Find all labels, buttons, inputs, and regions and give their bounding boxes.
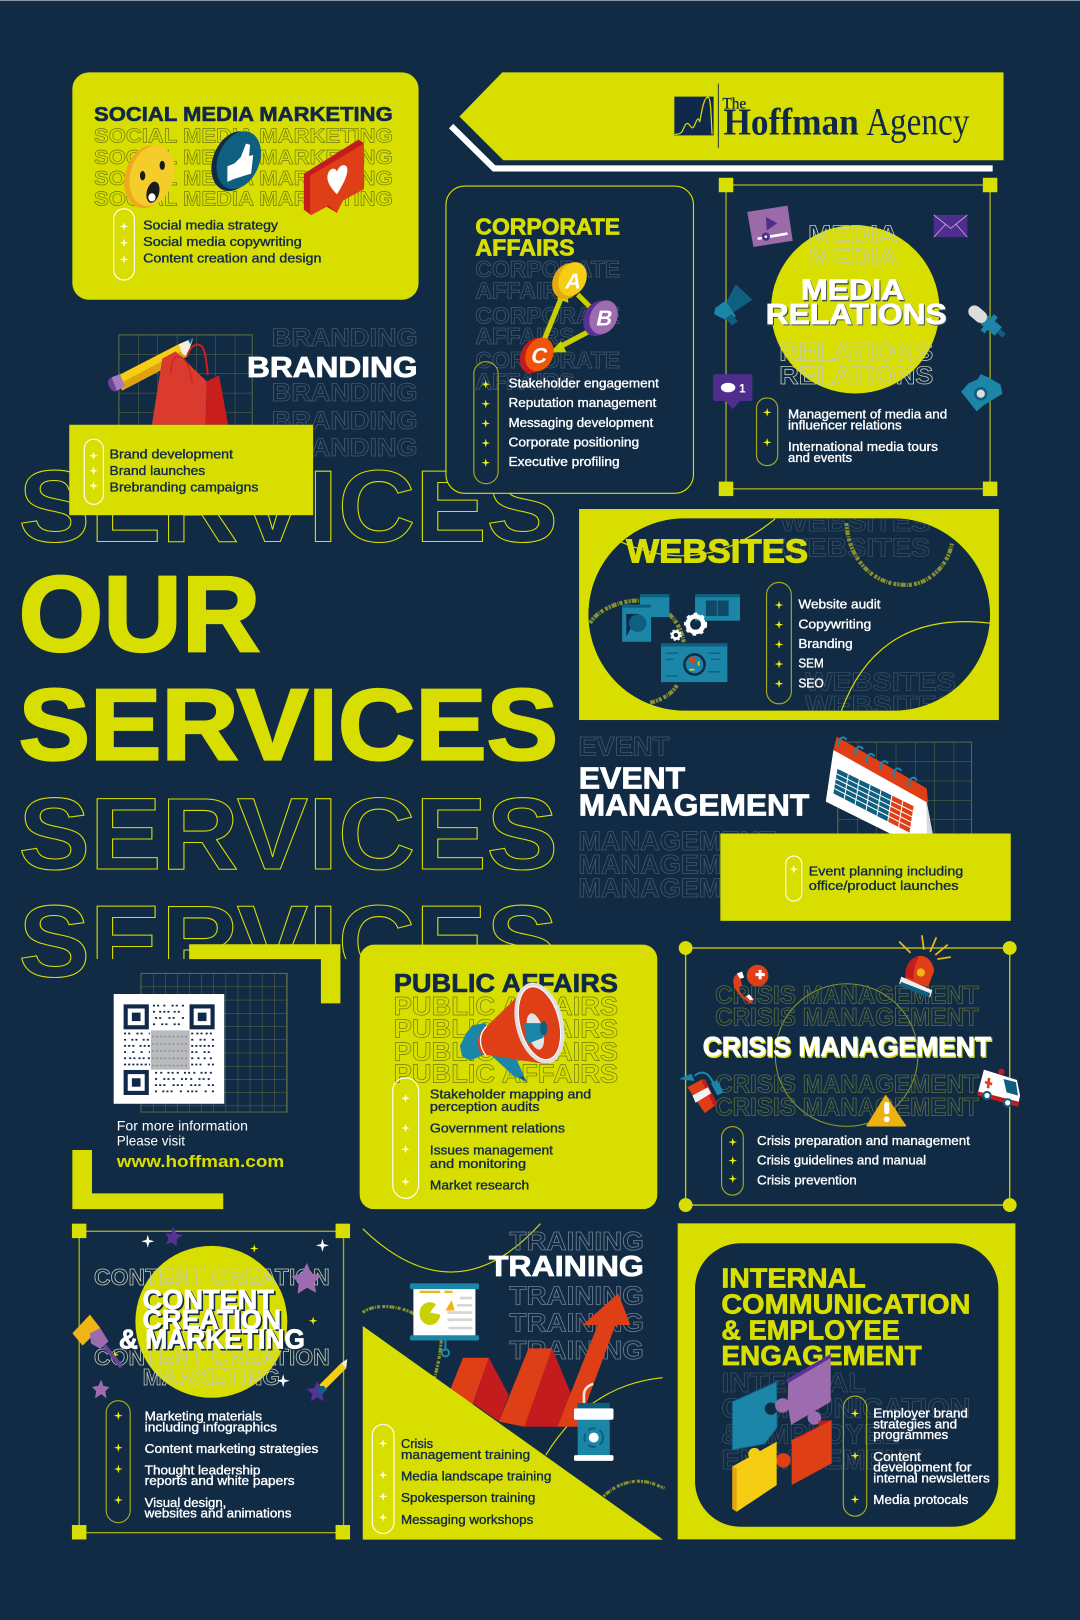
outlined words: MANAGEMENT xyxy=(578,849,776,879)
white arrow underline xyxy=(451,126,993,168)
bullet text: strategies and xyxy=(873,1416,957,1431)
text: for more information: Please visit xyxy=(117,1134,185,1149)
outlined words xyxy=(780,509,956,720)
repeated outlined heading: PUBLIC AFFAIRS xyxy=(394,1014,618,1044)
bullet text: Website audit xyxy=(798,597,881,612)
bullet text: Messaging workshops xyxy=(401,1512,533,1527)
repeated outlined heading xyxy=(94,125,393,211)
outlined words: WEBSITES xyxy=(780,535,930,563)
bullet text: Reputation management xyxy=(508,395,657,410)
bullet text xyxy=(873,1405,990,1507)
bullet text: Brebranding campaigns xyxy=(110,479,258,494)
bullet text: Crisis guidelines and manual xyxy=(757,1153,926,1168)
bullet card xyxy=(720,834,1011,921)
bullet pill xyxy=(372,1424,394,1533)
heading: media relations: RELATIONS xyxy=(767,300,948,332)
repeated outlined heading: PUBLIC AFFAIRS xyxy=(394,1059,618,1089)
outlined words: WEBSITES xyxy=(805,692,956,720)
heading: corporate affairs: CORPORATE xyxy=(475,213,620,239)
repeated outlined heading: CORPORATE xyxy=(475,256,620,282)
icon: pencil xyxy=(316,1359,347,1396)
panel: media relations xyxy=(713,178,1010,496)
repeated outlined heading: PUBLIC AFFAIRS xyxy=(394,991,618,1021)
bullet text: Spokesperson training xyxy=(401,1490,535,1505)
panel: websites xyxy=(579,509,999,720)
bullet text: Stakeholder engagement xyxy=(508,376,659,391)
icons: stars xyxy=(92,1227,329,1401)
title word: services: SERVICES xyxy=(19,669,558,782)
heading: event management xyxy=(579,762,810,823)
bullet text xyxy=(788,407,947,465)
repeated outlined heading: BRANDING xyxy=(272,380,418,407)
bullet text: Market research xyxy=(430,1178,529,1193)
lime triangle xyxy=(363,1326,663,1540)
bullet text: influencer relations xyxy=(788,417,902,432)
heading: media relations xyxy=(766,275,948,332)
outlined words: WEBSITES xyxy=(805,669,956,697)
icon: red growth arrow xyxy=(439,1293,630,1427)
repeated outlined heading xyxy=(475,256,620,395)
bullet text: including infographics xyxy=(145,1419,277,1434)
repeated outlined words: CONTENT CREATION xyxy=(94,1264,330,1290)
heading: content creation and marketing: CREATION xyxy=(143,1304,281,1335)
repeated outlined heading: CRISIS MANAGEMENT xyxy=(715,983,979,1010)
outlined services row 3: SERVICES xyxy=(19,776,558,891)
lime circle xyxy=(135,1246,287,1398)
repeated outlined words: CONTENT CREATION xyxy=(94,1344,330,1370)
repeated outlined words: MEDIA xyxy=(808,222,898,249)
icon: jigsaw puzzle xyxy=(732,1354,832,1512)
bullet text: Event planning including xyxy=(809,863,963,878)
repeated outlined words: RELATIONS xyxy=(779,340,933,367)
grid backdrop xyxy=(119,335,252,426)
icon: calendar xyxy=(826,737,933,834)
bullet text: Stakeholder mapping and xyxy=(430,1087,591,1102)
repeated outlined heading: AFFAIRS xyxy=(475,323,575,349)
heading: content creation and marketing: & MARKETING xyxy=(119,1324,305,1355)
heading: event management: EVENT xyxy=(579,762,686,796)
bullet text xyxy=(757,1133,970,1187)
bullet text: Crisis preparation and management xyxy=(757,1133,970,1148)
heading: internal communication: COMMUNICATION xyxy=(721,1288,970,1319)
bullet text: Crisis xyxy=(401,1436,433,1451)
bullet text xyxy=(144,1409,318,1521)
bullet text: Media landscape training xyxy=(401,1468,551,1483)
logo: the hoffman agency: Agency xyxy=(866,100,970,143)
bullet text: Brand launches xyxy=(110,463,205,478)
bullet text: Executive profiling xyxy=(508,454,620,469)
repeated outlined heading: CORPORATE xyxy=(475,347,620,373)
repeated outlined heading xyxy=(721,1367,970,1475)
bullet pill xyxy=(843,1396,867,1516)
icon: paintbrush xyxy=(72,1315,121,1369)
icon: chat bubble xyxy=(713,374,752,409)
bullet text: Media protocals xyxy=(873,1492,968,1507)
panel: qr code and website link xyxy=(72,944,340,1209)
bullet text: Employer brand xyxy=(873,1405,968,1420)
heading: social media marketing: SOCIAL MEDIA MARKETING xyxy=(94,103,393,126)
text: for more information: For more information xyxy=(117,1119,248,1134)
icon: warning triangle xyxy=(866,1094,906,1127)
logo: the hoffman agency: The xyxy=(722,96,746,113)
outlined words xyxy=(578,731,776,903)
panel: content creation and marketing xyxy=(72,1224,350,1539)
bullet text: Content creation and design xyxy=(143,251,321,266)
outlined services row 4: SERVICES xyxy=(19,884,558,999)
repeated outlined heading: SOCIAL MEDIA MARKETING xyxy=(94,188,393,211)
bullet text: management training xyxy=(401,1447,530,1462)
panel: corporate affairs xyxy=(446,186,693,493)
icon: microphone xyxy=(963,300,1010,344)
icon: video player xyxy=(747,206,793,247)
decorative arcs xyxy=(363,1224,665,1538)
panel: event management xyxy=(578,731,1011,921)
bullet text: Government relations xyxy=(430,1121,565,1136)
bullet text: Marketing materials xyxy=(145,1409,262,1424)
panel: crisis management xyxy=(679,935,1020,1212)
panel: training xyxy=(363,1224,665,1540)
heading: media relations: MEDIA xyxy=(801,275,904,307)
bullet text: Brand development xyxy=(110,446,234,461)
icon: fire extinguisher xyxy=(679,1073,723,1113)
outlined words: EVENT xyxy=(578,731,670,761)
bullet text: Visual design, xyxy=(145,1495,226,1510)
heading: content creation and marketing: CONTENT xyxy=(144,1285,275,1316)
heading: branding: BRANDING xyxy=(247,352,418,384)
bullet text: Branding xyxy=(798,636,853,651)
lime circle xyxy=(771,225,939,394)
text: for more information xyxy=(116,1119,284,1171)
repeated outlined heading xyxy=(394,991,618,1089)
repeated outlined heading: CRISIS MANAGEMENT xyxy=(715,1005,979,1032)
bullet text xyxy=(401,1436,551,1527)
repeated outlined words xyxy=(94,1264,330,1390)
bullet pill xyxy=(786,856,802,901)
bullet text: office/product launches xyxy=(809,878,959,893)
grid backdrop xyxy=(141,973,287,1112)
repeated outlined words xyxy=(779,222,933,390)
bullet text: Content marketing strategies xyxy=(145,1441,318,1456)
bullet pill xyxy=(84,439,103,504)
heading: internal communication: INTERNAL xyxy=(721,1263,866,1294)
bullet text: reports and white papers xyxy=(145,1473,295,1488)
repeated outlined heading: INTERNAL xyxy=(721,1367,866,1398)
heading: content creation and marketing: & MARKETING xyxy=(120,1325,306,1356)
logo: the hoffman agency xyxy=(674,84,970,148)
panel: internal communication and employee engagement xyxy=(678,1223,1015,1539)
bullet text: Management of media and xyxy=(788,407,947,422)
heading: crisis management: CRISIS MANAGEMENT xyxy=(703,1031,991,1062)
outlined words: WEBSITES xyxy=(780,509,930,537)
bullet text: and monitoring xyxy=(430,1156,526,1171)
repeated outlined heading: COMMUNICATION xyxy=(721,1392,970,1423)
panel: public affairs xyxy=(360,945,657,1209)
repeated outlined heading: SOCIAL MEDIA MARKETING xyxy=(94,146,393,169)
icon: web windows and gears xyxy=(622,594,740,682)
heading: content creation and marketing: CREATION xyxy=(144,1306,283,1337)
bullet text xyxy=(143,217,321,266)
bullet text: development for xyxy=(873,1460,972,1475)
heading: content creation and marketing xyxy=(119,1284,306,1356)
icon: camera xyxy=(961,374,1002,411)
heading: public affairs: PUBLIC AFFAIRS xyxy=(394,968,618,998)
repeated outlined words: MEDIA xyxy=(808,245,898,272)
title word: our: OUR xyxy=(19,554,260,674)
repeated outlined heading: BRANDING xyxy=(272,325,418,352)
repeated outlined words: MARKETING xyxy=(143,1364,280,1390)
bullet text: SEM xyxy=(798,656,824,671)
icon: siren xyxy=(899,935,951,997)
bullet text: Social media copywriting xyxy=(143,234,302,249)
heading: content creation and marketing: CONTENT xyxy=(143,1284,274,1315)
bullet text xyxy=(809,863,963,893)
bullet text: SEO xyxy=(798,675,824,690)
bullet text xyxy=(798,597,881,690)
icon: abc network: B xyxy=(594,306,615,330)
bullet text: websites and animations xyxy=(144,1506,291,1521)
bullet text: internal newsletters xyxy=(873,1471,990,1486)
bullet text: Messaging development xyxy=(508,415,654,430)
outlined words: MANAGEMENT xyxy=(578,826,776,856)
repeated outlined heading: ENGAGEMENT xyxy=(721,1444,922,1475)
repeated outlined heading: SOCIAL MEDIA MARKETING xyxy=(94,125,393,148)
icon: megaphone xyxy=(460,977,573,1082)
heading: corporate affairs: AFFAIRS xyxy=(475,234,575,260)
icon: abc network: A xyxy=(563,269,584,293)
bullet pill xyxy=(474,362,498,484)
grid backdrop xyxy=(838,742,971,834)
icon: presentation screen xyxy=(410,1283,479,1356)
icon: podium with microphone xyxy=(574,1384,613,1461)
repeated outlined words: RELATIONS xyxy=(779,363,933,390)
icon: phone and medical pin xyxy=(733,965,768,1004)
heading: media relations: RELATIONS xyxy=(766,299,947,331)
panel: branding xyxy=(69,325,418,515)
icon: shopping bag xyxy=(152,345,228,425)
icon: megaphone xyxy=(714,284,752,326)
logo: the hoffman agency: Hoffman xyxy=(723,101,859,143)
icon: heart speech bubble xyxy=(304,140,364,215)
heading: websites: WEBSITES xyxy=(626,534,808,571)
icon: abc network: C xyxy=(529,343,550,368)
heading: internal communication: ENGAGEMENT xyxy=(721,1340,922,1371)
text: for more information: www.hoffman.com xyxy=(116,1152,284,1171)
bullet pill xyxy=(393,1078,419,1198)
heading: crisis management: CRISIS MANAGEMENT xyxy=(704,1032,992,1063)
bullet text: Copywriting xyxy=(798,616,871,631)
bullet text: Thought leadership xyxy=(145,1462,260,1477)
bullet text: perception audits xyxy=(430,1099,539,1114)
heading: training: TRAINING xyxy=(489,1251,644,1283)
bullet pill xyxy=(106,1401,130,1523)
outlined services row 1: SERVICES xyxy=(19,449,558,564)
bullet pill xyxy=(757,398,778,466)
repeated outlined heading: & EMPLOYEE xyxy=(721,1418,900,1449)
bullet pill xyxy=(114,209,134,280)
repeated outlined heading: CRISIS MANAGEMENT xyxy=(715,1072,979,1099)
panel: social media marketing xyxy=(72,72,419,300)
icon: envelope xyxy=(934,215,967,237)
logo banner arrow xyxy=(451,72,1004,168)
outlined words: MANAGEMENT xyxy=(578,873,776,903)
bullet text: Content xyxy=(873,1449,921,1464)
icon: thumbs up xyxy=(203,124,269,198)
heading: internal communication: & EMPLOYEE xyxy=(721,1314,900,1345)
corner bracket top right xyxy=(189,944,340,1003)
repeated outlined heading: TRAINING xyxy=(510,1337,644,1365)
icon: chat bubble: 1 xyxy=(739,382,746,396)
repeated outlined heading: AFFAIRS xyxy=(475,369,575,395)
bullet text: Crisis prevention xyxy=(757,1172,857,1187)
icon: abc network xyxy=(514,257,623,378)
bullet text: Issues management xyxy=(430,1142,553,1157)
repeated outlined heading xyxy=(715,983,979,1121)
icon: pencil xyxy=(106,338,193,393)
repeated outlined heading: AFFAIRS xyxy=(475,278,575,304)
bullet pill xyxy=(767,582,791,704)
bullet text xyxy=(508,376,659,469)
inner stadium shape xyxy=(588,509,990,720)
bullet text: Social media strategy xyxy=(143,217,279,232)
big heading: our services xyxy=(19,449,558,999)
repeated outlined heading: BRANDING xyxy=(272,408,418,435)
repeated outlined heading: CORPORATE xyxy=(475,302,620,328)
repeated outlined heading: BRANDING xyxy=(272,435,418,462)
bullet text xyxy=(430,1087,591,1193)
repeated outlined heading: TRAINING xyxy=(510,1310,644,1338)
bullet text xyxy=(110,446,258,494)
thin circle xyxy=(775,984,918,1126)
qr code xyxy=(114,994,224,1104)
repeated outlined heading: TRAINING xyxy=(510,1228,644,1256)
bullet text: programmes xyxy=(873,1427,948,1442)
bullet text: and events xyxy=(788,450,852,465)
repeated outlined heading xyxy=(510,1228,644,1365)
icon: ambulance xyxy=(978,1069,1020,1107)
bullet text: Corporate positioning xyxy=(508,434,639,449)
icon: surprised emoji xyxy=(117,140,181,214)
repeated outlined heading xyxy=(272,325,418,462)
heading: event management: MANAGEMENT xyxy=(579,789,810,823)
heading: internal communication xyxy=(721,1263,970,1371)
repeated outlined heading: TRAINING xyxy=(510,1282,644,1310)
heading: corporate affairs xyxy=(475,213,620,260)
bullet card xyxy=(69,425,313,515)
repeated outlined heading: PUBLIC AFFAIRS xyxy=(394,1036,618,1066)
heading: media relations: MEDIA xyxy=(802,276,905,308)
repeated outlined heading: CRISIS MANAGEMENT xyxy=(715,1094,979,1121)
corner bracket bottom left xyxy=(72,1150,223,1209)
bullet text: International media tours xyxy=(788,439,938,454)
repeated outlined heading: SOCIAL MEDIA MARKETING xyxy=(94,167,393,190)
bullet pill xyxy=(722,1127,743,1195)
